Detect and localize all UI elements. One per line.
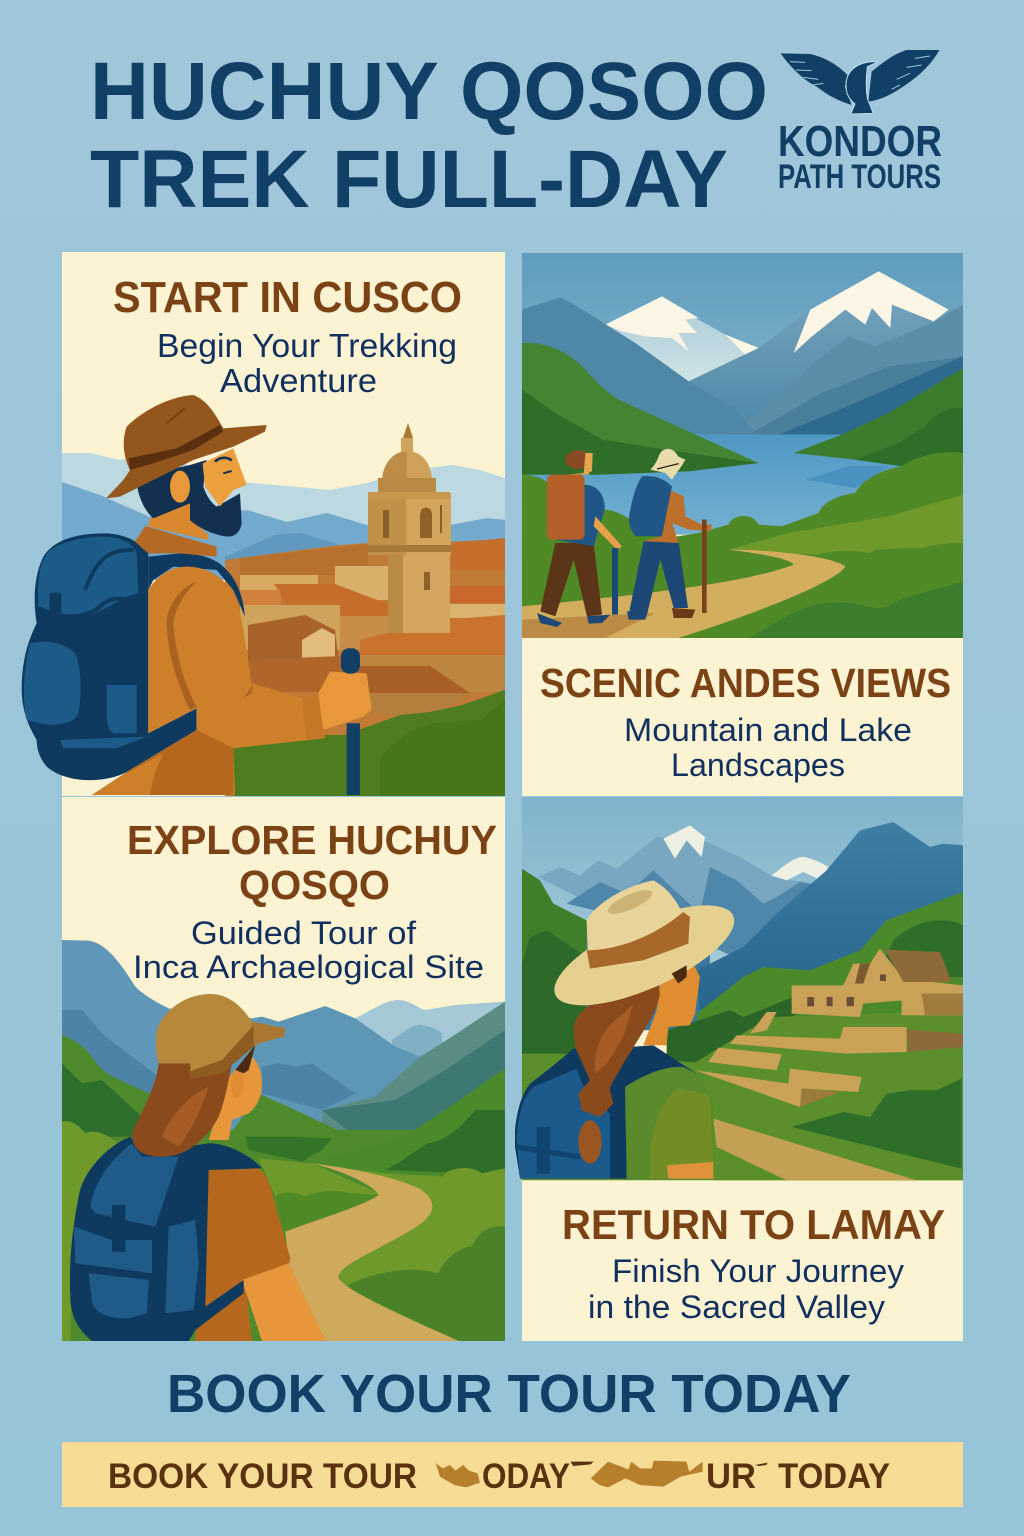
church tower <box>368 423 452 633</box>
panel: scenic Andes views <box>522 253 963 796</box>
head and beard <box>137 448 247 540</box>
logo wordmark: KONDOR <box>778 117 942 166</box>
hiker one <box>537 450 622 627</box>
banner silhouettes <box>436 1461 768 1487</box>
subheading: Landscapes <box>671 747 845 783</box>
logo wordmark <box>778 117 942 196</box>
two hikers <box>537 449 712 627</box>
banner text: ODAY <box>482 1457 570 1496</box>
scene: valley and path <box>62 940 505 1341</box>
panel: return to Lamay <box>515 797 963 1341</box>
figure: hiker with sun hat <box>515 880 747 1179</box>
heading: RETURN TO LAMAY <box>562 1201 945 1248</box>
heading: START IN CUSCO <box>113 273 462 322</box>
scene: mountains and lake <box>522 253 963 638</box>
subheading <box>133 915 484 985</box>
logo: Kondor Path Tours <box>778 50 942 196</box>
hat <box>106 395 267 498</box>
title: TREK FULL-DAY <box>90 134 728 225</box>
call to action heading: BOOK YOUR TOUR TODAY <box>167 1364 851 1424</box>
panel: explore Huchuy Qosqo <box>62 797 505 1341</box>
booking banner <box>62 1442 963 1507</box>
subheading: Guided Tour of <box>191 915 416 951</box>
figure: hiker with cap <box>70 994 325 1341</box>
banner text: TODAY <box>778 1457 890 1496</box>
subheading: Begin Your Trekking <box>157 327 457 364</box>
collar <box>135 526 217 557</box>
subheading: Inca Archaelogical Site <box>133 949 484 985</box>
hiker two <box>627 449 712 620</box>
logo wordmark: PATH TOURS <box>778 158 941 196</box>
subheading: Mountain and Lake <box>624 712 912 748</box>
scene: Inca terraces <box>522 797 963 1180</box>
strap and jacket <box>148 553 245 617</box>
backpack <box>22 533 197 780</box>
scene: Cusco town <box>62 423 505 796</box>
title: HUCHUY QOSOO <box>90 46 768 137</box>
subheading <box>157 327 457 399</box>
subheading: Finish Your Journey <box>612 1253 904 1289</box>
figure: male hiker <box>22 395 372 795</box>
heading: QOSQO <box>239 862 390 908</box>
heading: SCENIC ANDES VIEWS <box>540 660 951 706</box>
banner text: UR <box>706 1457 756 1496</box>
title <box>90 46 768 225</box>
banner text: BOOK YOUR TOUR <box>108 1457 417 1496</box>
icon: condor <box>781 50 939 114</box>
subheading: Adventure <box>220 362 377 399</box>
subheading <box>588 1253 904 1325</box>
subheading <box>624 712 912 783</box>
heading <box>127 817 497 908</box>
heading: EXPLORE HUCHUY <box>127 817 497 863</box>
trekking pole and hand <box>318 648 372 795</box>
panel: start in Cusco <box>22 252 505 796</box>
subheading: in the Sacred Valley <box>588 1289 885 1325</box>
banner text <box>108 1457 890 1496</box>
